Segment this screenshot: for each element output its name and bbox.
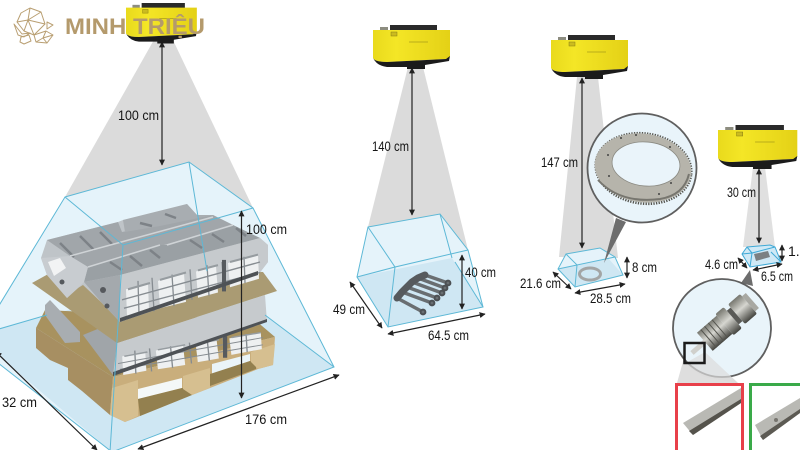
camera 4 — [718, 125, 797, 169]
icon: crystal — [14, 8, 53, 44]
camera 1 — [126, 3, 197, 43]
depth arrow: 49 cm — [350, 282, 382, 328]
field of view cone 1 — [65, 38, 253, 208]
field of view cone 2 — [368, 67, 468, 250]
cardboard sheet — [32, 262, 277, 343]
distance arrow: 140 cm — [411, 68, 413, 215]
label: distance 147 cm: 147 cm — [541, 154, 578, 170]
callout pointer — [604, 218, 626, 263]
distance arrow: 30 cm — [758, 169, 760, 243]
label: distance 140 cm: 140 cm — [372, 138, 409, 154]
defect panel: red frame — [676, 384, 742, 450]
depth arrow: 4.6 cm — [738, 258, 747, 268]
lower engine blocks — [45, 295, 267, 376]
label: depth 4.6 cm: 4.6 cm — [705, 256, 738, 272]
scan volume 2 edges — [357, 214, 483, 327]
distance arrow: 100 cm — [161, 42, 163, 165]
scan volume 3 — [558, 248, 623, 287]
label: width 176 cm: 176 cm — [245, 411, 287, 427]
label: height 8 cm: 8 cm — [632, 259, 657, 275]
label: height 100 cm: 100 cm — [246, 221, 287, 237]
depth arrow: 132 cm — [0, 352, 97, 450]
pallet — [36, 310, 275, 422]
label: depth 32 cm: 32 cm — [2, 394, 37, 410]
magnifier circle with connector — [673, 279, 771, 383]
label: height 40 cm: 40 cm — [465, 264, 496, 280]
scan volume 2 — [357, 214, 483, 327]
logo: crystal icon and wordmark — [14, 8, 205, 44]
height arrow: 40 cm — [461, 255, 463, 309]
camera 2 — [373, 25, 450, 69]
connecting rods — [397, 275, 450, 314]
width arrow: 28.5 cm — [575, 284, 625, 293]
distance arrow: 147 cm — [581, 78, 583, 248]
width arrow: 176 cm — [138, 375, 339, 449]
width arrow: 6.5 cm — [753, 264, 782, 270]
depth arrow: 21.6 cm — [553, 272, 571, 289]
label: depth 49 cm: 49 cm — [333, 301, 365, 317]
label: width 28.5 cm: 28.5 cm — [590, 290, 631, 306]
label: distance 100 cm: 100 cm — [118, 107, 159, 123]
label: width 64.5 cm: 64.5 cm — [428, 327, 469, 343]
scene 1: pallet with engine blocks — [0, 3, 339, 450]
zoom cone from detail square — [677, 352, 738, 383]
field of view cone 3 — [559, 77, 618, 258]
scan volume 3 edges — [558, 248, 623, 287]
width arrow: 64.5 cm — [388, 314, 485, 334]
field of view cone 4 — [743, 167, 775, 247]
height arrow: 100 cm — [240, 211, 242, 398]
camera 3 — [551, 35, 628, 79]
detail square — [684, 343, 704, 363]
magnifier circle with gear ring — [588, 114, 696, 222]
small gear ring — [580, 268, 600, 280]
wordmark: MINH TRIỆU — [65, 14, 205, 39]
upper engine blocks — [41, 204, 268, 322]
good panel: green frame — [750, 384, 800, 450]
label: depth 21.6 cm: 21.6 cm — [520, 275, 561, 291]
scene 2: connecting rods — [333, 25, 496, 343]
scene 4: pin connector — [673, 125, 800, 450]
scene 3: gear ring — [520, 35, 696, 306]
height arrow: 1.2 cm — [781, 245, 783, 261]
scan volume 4 — [742, 245, 781, 267]
scan volume 1 — [0, 162, 334, 450]
scan volume 1 edges — [0, 162, 334, 450]
label: distance 30 cm: 30 cm — [727, 184, 756, 200]
callout pointer — [741, 270, 753, 286]
height arrow: 8 cm — [626, 257, 628, 278]
